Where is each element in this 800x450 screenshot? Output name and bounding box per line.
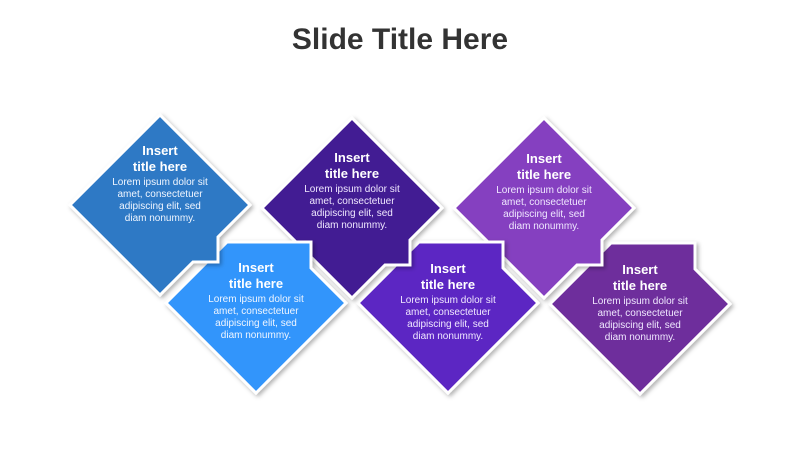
panel: step 2: amet, consectetuer	[213, 306, 299, 317]
panel: step 4: diam nonummy.	[413, 331, 483, 342]
panel: step 5: diam nonummy.	[509, 221, 579, 232]
panel: step 1	[70, 115, 250, 295]
panel: step 1: diam nonummy.	[125, 213, 195, 224]
panel: step 4: Lorem ipsum dolor sit	[400, 295, 496, 306]
panel: step 3: diam nonummy.	[317, 220, 387, 231]
panel: step 6	[550, 243, 730, 394]
panel: step 4: adipiscing elit, sed	[407, 319, 489, 330]
panel: step 2: diam nonummy.	[221, 330, 291, 341]
panel: step 1: title here	[133, 159, 187, 174]
panel: step 6: diam nonummy.	[605, 332, 675, 343]
panel: step 5: title here	[517, 167, 571, 182]
panel: step 6: adipiscing elit, sed	[599, 320, 681, 331]
panel: step 3	[262, 118, 442, 298]
panel: step 4	[358, 242, 538, 393]
panel: step 5: adipiscing elit, sed	[503, 209, 585, 220]
panel: step 6: Lorem ipsum dolor sit	[592, 296, 688, 307]
panel: step 2: adipiscing elit, sed	[215, 318, 297, 329]
panel: step 3: adipiscing elit, sed	[311, 208, 393, 219]
panel: step 3: title here	[325, 166, 379, 181]
panel: step 6: amet, consectetuer	[597, 308, 683, 319]
panel: step 1: Lorem ipsum dolor sit	[112, 177, 208, 188]
panel: step 2	[166, 242, 346, 393]
panel: step 4: amet, consectetuer	[405, 307, 491, 318]
panel: step 4: Insert	[430, 261, 466, 276]
panel: step 4: title here	[421, 277, 475, 292]
panel: step 6: title here	[613, 278, 667, 293]
panel: step 2: title here	[229, 276, 283, 291]
panel: step 3: Lorem ipsum dolor sit	[304, 184, 400, 195]
panel: step 5: Lorem ipsum dolor sit	[496, 185, 592, 196]
panel: step 3: amet, consectetuer	[309, 196, 395, 207]
panel: step 6: Insert	[622, 262, 658, 277]
panel: step 5: amet, consectetuer	[501, 197, 587, 208]
panel: step 5	[454, 118, 634, 298]
panel: step 3: Insert	[334, 150, 370, 165]
panel: step 1: Insert	[142, 143, 178, 158]
panel: step 2: Lorem ipsum dolor sit	[208, 294, 304, 305]
title: Slide Title Here	[292, 23, 508, 56]
panel: step 1: amet, consectetuer	[117, 189, 203, 200]
panel: step 2: Insert	[238, 260, 274, 275]
panel: step 5: Insert	[526, 151, 562, 166]
panel: step 1: adipiscing elit, sed	[119, 201, 201, 212]
